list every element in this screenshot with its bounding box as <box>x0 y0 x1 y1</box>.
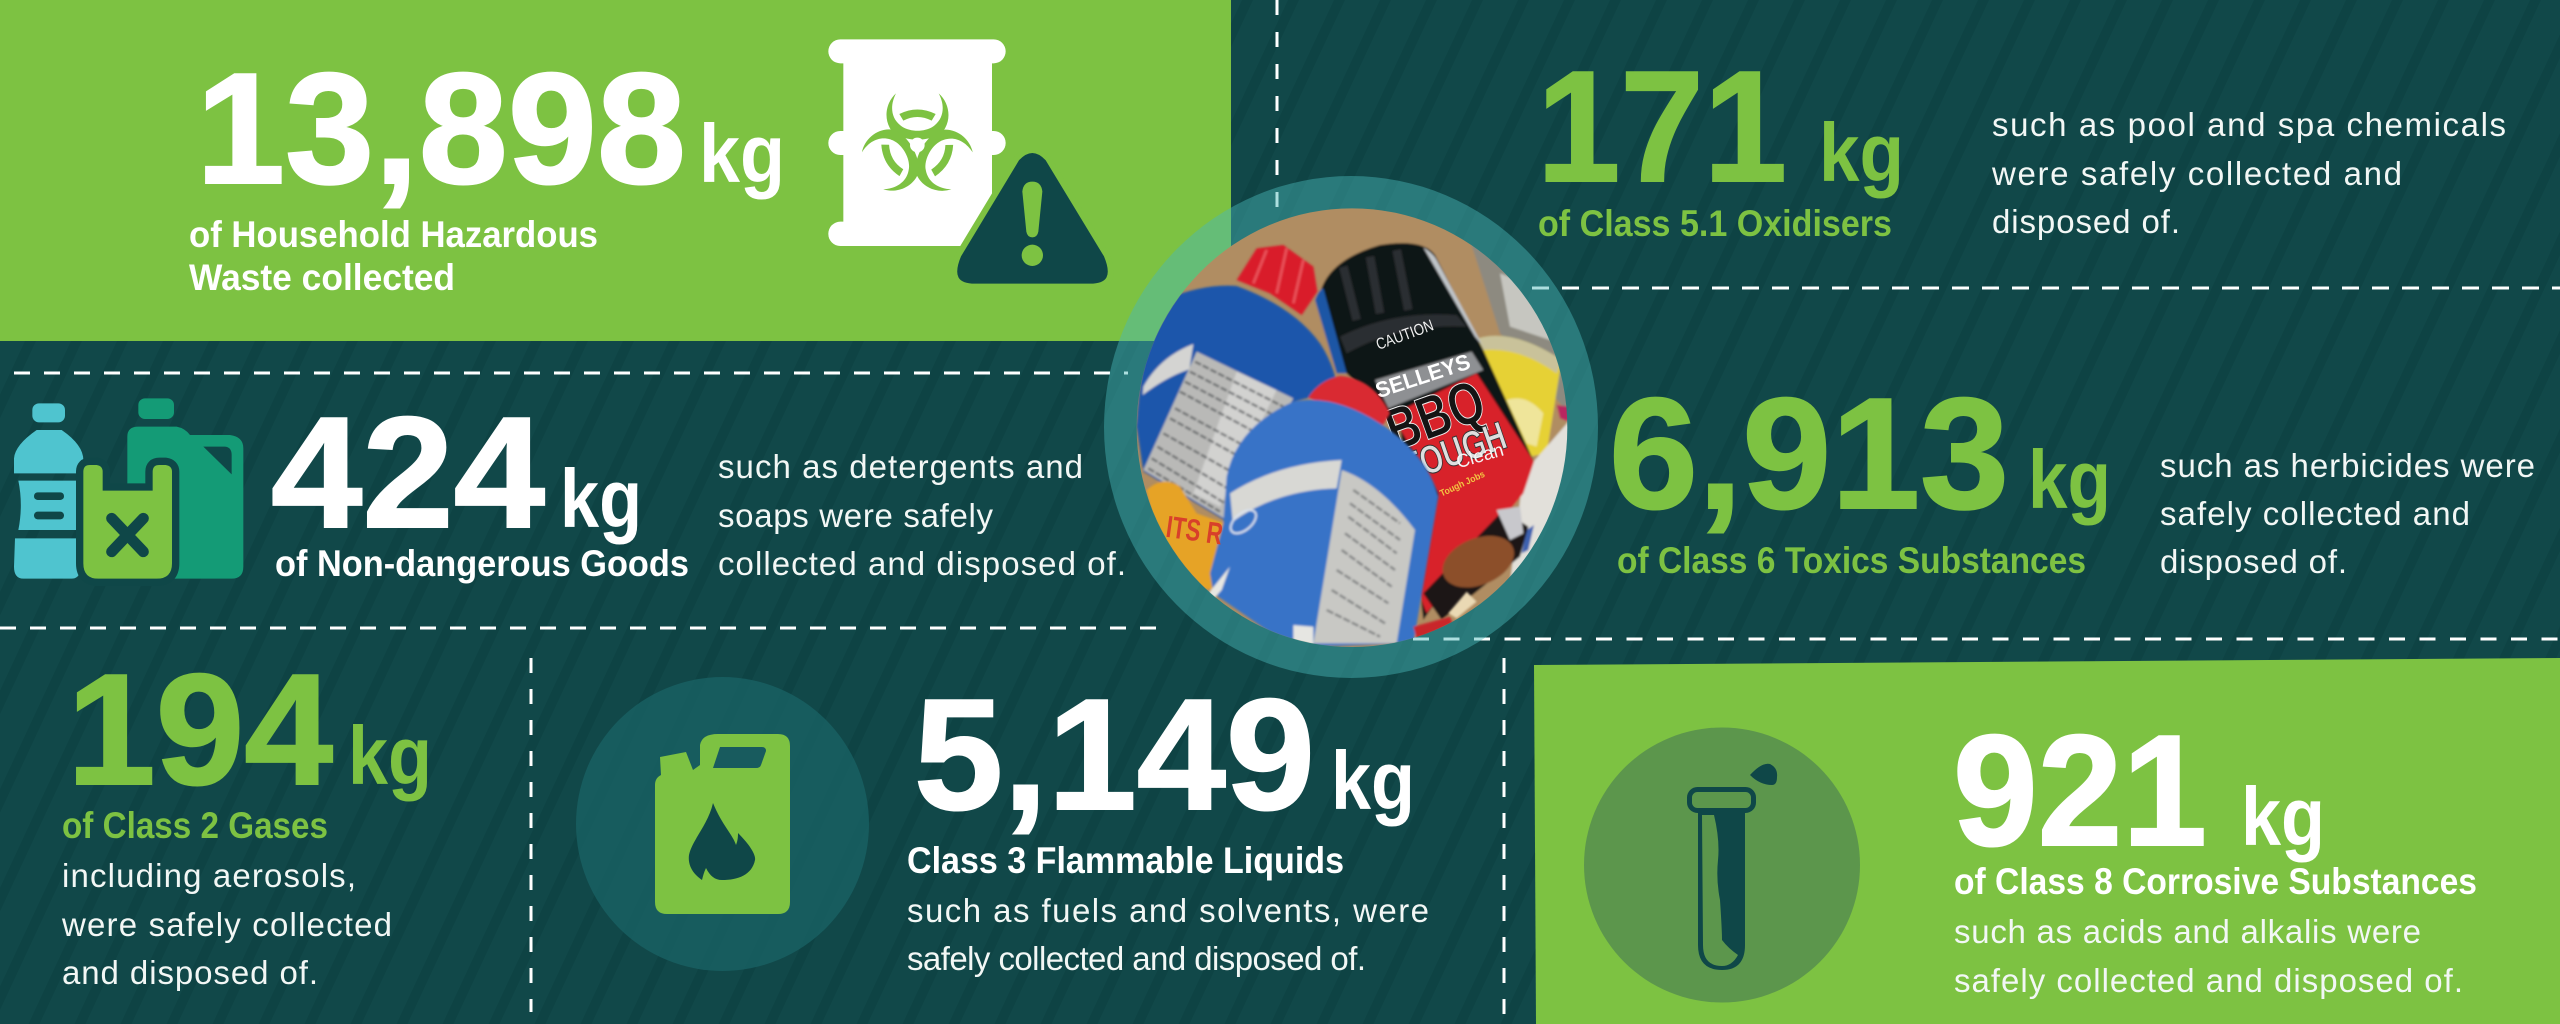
description <box>1954 913 2463 999</box>
unit: kg: kg <box>2028 433 2111 526</box>
description: disposed of. <box>2160 543 2347 580</box>
test tube <box>1698 808 1745 970</box>
label: class 8 corrosive substances: of Class 8 Corrosive Substances <box>1954 861 2477 902</box>
number: 921: 921 <box>1953 703 2207 879</box>
description: such as herbicides were <box>2160 447 2535 484</box>
icon: biohazard symbol <box>857 93 977 198</box>
description: such as fuels and solvents, were <box>907 892 1429 929</box>
label: class 3 flammable liquids: Class 3 Flammable Liquids <box>907 840 1344 881</box>
label: household hazardous waste collected: Waste collected <box>189 257 455 298</box>
icon: corrosive test tube <box>1584 728 1860 1002</box>
can handle hole <box>713 747 766 768</box>
description: and disposed of. <box>62 954 318 991</box>
description: such as acids and alkalis were <box>1954 913 2421 950</box>
description <box>1991 106 2506 240</box>
icon: jug <box>127 398 243 579</box>
product text on the can: SELLEYS <box>1372 349 1473 403</box>
number: 5,149: 5,149 <box>914 667 1315 843</box>
panel: class 8 corrosive substances <box>1534 658 2560 1024</box>
description: safely collected and <box>2160 495 2470 532</box>
icon: flammable liquid can <box>576 677 869 971</box>
number: 6,913: 6,913 <box>1609 366 2009 542</box>
number: 171: 171 <box>1537 39 1787 215</box>
description: were safely collected <box>61 906 392 943</box>
unit: kg: kg <box>348 709 432 802</box>
icon background circle <box>576 677 869 971</box>
stat: 6,913 kg class 6 toxics substances <box>1609 366 2535 581</box>
description <box>61 857 392 991</box>
description: such as pool and spa chemicals <box>1992 106 2506 143</box>
description: disposed of. <box>1992 203 2180 240</box>
photo circle: hazardous products <box>1104 176 1598 678</box>
unit: kg: kg <box>1819 106 1904 199</box>
stat: 13,898 kg household hazardous waste <box>189 41 785 298</box>
unit: kg: kg <box>2241 770 2325 863</box>
unit: kg: kg <box>560 452 642 545</box>
icon: non-dangerous goods containers <box>14 398 243 579</box>
label: household hazardous waste collected: of Household Hazardous <box>189 214 598 255</box>
icon: warning triangle <box>954 150 1111 287</box>
product text on the can: Clean <box>1454 439 1506 472</box>
stat: 5,149 kg class 3 flammable liquids <box>907 667 1429 977</box>
drop <box>1750 764 1777 785</box>
stat: 921 kg class 8 corrosive substances <box>1953 703 2477 999</box>
label: class 2 gases: of Class 2 Gases <box>62 805 328 846</box>
description: such as detergents and <box>718 448 1083 485</box>
icon: jerry can <box>655 734 790 914</box>
product text on the can: TOUGH <box>1397 414 1512 490</box>
icon: biohazard barrel with warning triangle <box>828 39 1111 287</box>
number: 13,898: 13,898 <box>196 41 686 217</box>
panel: household hazardous waste <box>0 0 1231 341</box>
test tube cap <box>1690 790 1754 810</box>
icon: bag with cross <box>83 465 172 579</box>
label: non-dangerous goods: of Non-dangerous Goods <box>275 543 689 584</box>
icon: barrel <box>828 39 1006 246</box>
description: safely collected and disposed of. <box>907 940 1366 977</box>
product text on the can <box>1372 317 1512 498</box>
description: safely collected and disposed of. <box>1954 962 2463 999</box>
description: soaps were safely <box>718 497 994 534</box>
label: class 6 toxics substances: of Class 6 Toxics Substances <box>1617 540 2086 581</box>
product text on the can: CAUTION <box>1374 317 1436 354</box>
stat: 194 kg class 2 gases <box>61 642 432 991</box>
description: were safely collected and <box>1991 155 2402 192</box>
product text on the can: BBQ <box>1377 367 1493 464</box>
label: household hazardous waste collected <box>189 214 598 298</box>
stat: 424 kg non-dangerous goods <box>271 385 1126 584</box>
number: 194: 194 <box>67 642 333 818</box>
unit: kg: kg <box>699 107 785 200</box>
product text on the can: Tough Jobs <box>1438 469 1486 498</box>
test tube contents window <box>1702 815 1738 966</box>
photo of household chemical containers <box>1130 203 1580 653</box>
stat: 171 kg class 5.1 oxidisers <box>1537 39 2506 244</box>
product text on the orange bottle: ITS R <box>1164 510 1225 551</box>
description <box>907 892 1429 977</box>
description: including aerosols, <box>62 857 356 894</box>
description <box>2160 447 2535 580</box>
icon background circle <box>1584 728 1860 1002</box>
icon: flame <box>689 803 755 880</box>
ring <box>1104 176 1598 678</box>
unit: kg: kg <box>1331 734 1415 827</box>
description: collected and disposed of. <box>718 545 1126 582</box>
description <box>718 448 1126 582</box>
label: class 5.1 oxidisers: of Class 5.1 Oxidisers <box>1538 203 1892 244</box>
number: 424: 424 <box>271 385 545 561</box>
icon: bottle <box>14 403 83 579</box>
